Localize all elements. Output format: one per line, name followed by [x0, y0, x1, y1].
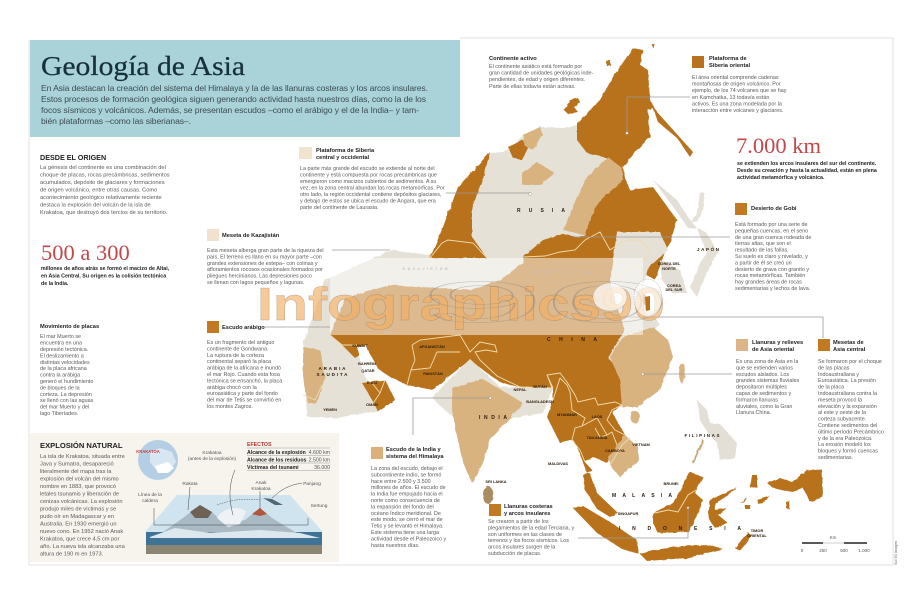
scale bar: Km: [830, 535, 837, 540]
country labels: [316, 208, 767, 538]
effects table: EFECTOS: [247, 442, 272, 448]
India surrounding beige: [432, 359, 553, 420]
east Siberia, Gobi, Central Asia and Southeast Asia brown plate: [330, 48, 693, 473]
legend: Plataforma de Siberia oriental: Siberia oriental: [709, 63, 751, 69]
country labels: BAHRÉIN: [358, 361, 376, 366]
Sri Lanka: [483, 486, 493, 504]
Continente activo text block: Continente activo: [489, 56, 537, 62]
Desde el origen text block: choque de placas, rocas precámbricas, sedimentos: [40, 172, 170, 178]
Taimyr brown patch: [508, 140, 528, 160]
effects table: 2.500 km: [309, 458, 330, 464]
legend: Desierto de Gobi: hay grandes áreas de rocas: [735, 280, 802, 286]
legend: Escudo arábigo: La ruptura de la corteza: [207, 353, 264, 359]
country labels: SAUDITA: [316, 372, 348, 377]
legend: Plataforma de Siberia oriental: en Kamchatka, 13 todavía están: [692, 95, 769, 101]
country labels: LAOS: [592, 414, 603, 419]
panel body text: Java y Sumatra, desapareció: [40, 462, 114, 468]
scale bar: 500: [840, 548, 848, 553]
legend: Escudo de la India y sistema del Himalaya: océano Índico meridional. De: [371, 510, 441, 517]
legend: Llanuras y relieves de Asia oriental: Es una zona de Asia en la: [736, 359, 798, 365]
scale bar: 0: [801, 548, 804, 553]
legend: Meseta de Kazajistán: [207, 229, 325, 286]
panel body text: nombre en 1883, que provocó: [40, 484, 116, 490]
Borneo: [653, 472, 703, 533]
legend: Plataforma de Siberia central y occidental: parte del continente de Laurasia.: [300, 205, 379, 211]
country labels: KUWAIT: [352, 343, 368, 348]
legend: Meseta de Kazajistán: pliegues hercinianos. Las depresiones poco: [207, 274, 312, 280]
legend: Llanuras y relieves de Asia oriental: grandes sistemas fluviales: [736, 378, 800, 384]
country labels: MALASIA: [612, 493, 672, 499]
legend: Escudo de la India y sistema del Himalaya: hace entre 2.500 y 3.500: [371, 479, 431, 485]
legend: Mesetas de Asia central: de las placas: [818, 365, 850, 371]
country labels: CHINA: [547, 337, 597, 343]
country labels: TAILANDIA: [587, 435, 608, 440]
legend: Desierto de Gobi: Su suelo es claro y nivelado, y: [735, 254, 808, 260]
legend: Llanuras costeras y arcos insulares: son uniformes en las clases de: [488, 532, 562, 538]
legend: Llanuras y relieves de Asia oriental: Llanuras y relieves: [752, 340, 803, 346]
Movimiento de placas text block: [40, 324, 99, 417]
legend: Plataforma de Siberia central y occidental: central y occidental: [316, 155, 370, 161]
legend: Desierto de Gobi: a partir de él se creó un: [735, 260, 792, 266]
legend: Mesetas de Asia central: al este y oeste de la: [818, 410, 866, 416]
watermark: [257, 258, 670, 335]
country labels: COREA: [667, 283, 681, 288]
Philippines: [697, 400, 737, 460]
legend: Mesetas de Asia central: [818, 339, 885, 461]
legend: Escudo de la India y sistema del Himalaya: Tetis y se levantó el Himalaya.: [371, 524, 444, 530]
Continente activo text block: pendientes, de edad y origen diferentes.: [489, 77, 585, 83]
legend: Escudo arábigo: los montes Zagros.: [207, 404, 253, 410]
Hainan: [630, 411, 640, 423]
legend: Llanuras y relieves de Asia oriental: capas de sedimentos y: [736, 391, 791, 397]
legend: Plataforma de Siberia central y occidental: vez, en la zona central abundan las rocas metamórficas. Por: [300, 186, 445, 192]
Desde el origen text block: DESDE EL ORIGEN: [40, 153, 106, 162]
legend: Escudo de la India y sistema del Himalaya: sistema del Himalaya: [386, 454, 444, 460]
Persian Gulf: [357, 345, 390, 377]
Movimiento de placas text block: contra la arábiga: [40, 373, 80, 379]
panel body text: cenizas volcánicas. La explosión: [40, 499, 123, 505]
effects table: [247, 442, 330, 471]
diagram labels: Sertung: [311, 503, 328, 509]
legend: Llanuras y relieves de Asia oriental: formaron llanuras: [736, 397, 778, 403]
legend: Plataforma de Siberia central y occidental: emergieron como macizos cubiertos de sedimentos. A su: [300, 179, 436, 185]
Desde el origen text block: de origen volcánico, entre otras causas. Como: [40, 188, 157, 194]
legend: Meseta de Kazajistán: Esta meseta alberga gran parte de la riqueza del: [207, 248, 324, 254]
legend: Mesetas de Asia central: Euroasiática. La presión: [818, 378, 876, 384]
legend: Mesetas de Asia central: Se formaron por el choque: [818, 359, 882, 365]
country labels: RUSIA: [517, 208, 565, 214]
tan band Siberia: [563, 157, 623, 235]
Continente activo text block: El continente asiático está formado por: [489, 64, 582, 70]
country labels: MONGOLIA: [535, 270, 591, 276]
diagram labels: caldera: [142, 498, 158, 504]
legend: Escudo arábigo: el mar Rojo. Cuando esta fosa: [207, 372, 280, 378]
legend: Plataforma de Siberia oriental: [692, 56, 788, 114]
leader lines: [265, 97, 823, 538]
watermark: 90: [420, 270, 670, 335]
legend: Plataforma de Siberia oriental: montañosas de origen volcánico. Por: [692, 82, 781, 88]
legend: Escudo arábigo: [207, 321, 284, 410]
legend: Escudo arábigo: Escudo arábigo: [222, 325, 265, 331]
legend: Desierto de Gobi: [735, 203, 813, 292]
east China plain tan: [610, 327, 673, 407]
legend: Escudo de la India y sistema del Himalaya: la expansión del fondo del: [371, 504, 434, 510]
Movimiento de placas text block: Movimiento de placas: [40, 324, 99, 330]
stat: 500 a 300: millones de años atrás se formó el macizo de Altai,: [41, 266, 170, 272]
Movimiento de placas text block: de bloques de la: [40, 385, 80, 391]
legend: Desierto de Gobi: rocas metamórficas. También: [735, 273, 805, 279]
effects table: Alcance de los residuos: [247, 458, 307, 464]
India shield tan: [452, 379, 523, 483]
leader dots: [489, 132, 689, 509]
legend: Mesetas de Asia central: meseta provocó la: [818, 397, 862, 403]
diagram labels: Panjang: [303, 481, 321, 487]
country labels: SRI LANKA: [485, 479, 507, 484]
legend: Desierto de Gobi: tierras altas, que son el: [735, 241, 791, 247]
panel body text: letales tsunamis y liberación de: [40, 492, 119, 498]
legend: Mesetas de Asia central: La erosión modeló los: [818, 442, 871, 448]
legend: Desierto de Gobi: desierto de grava con granito y: [735, 267, 809, 273]
legend: Plataforma de Siberia oriental: interacción entre volcanes y glaciares.: [692, 108, 783, 114]
Continente activo text block: Parte de ellas todavía están activas.: [489, 84, 576, 90]
country labels: ORIENTAL: [747, 533, 767, 538]
Movimiento de placas text block: El mar Muerto se: [40, 334, 81, 340]
country labels: VIETNAM: [632, 442, 650, 447]
legend: Llanuras y relieves de Asia oriental: escudos aislados. Los: [736, 372, 789, 378]
country labels: PAKISTÁN: [423, 371, 443, 376]
country labels: QATAR: [361, 368, 375, 373]
country labels: TIMOR: [751, 528, 763, 533]
legend: Escudo de la India y sistema del Himalaya: La zona del escudo, debajo el: [371, 466, 443, 472]
legend: Escudo de la India y sistema del Himalaya: actividad desde el Paleozoico y: [371, 536, 447, 542]
legend: Plataforma de Siberia central y occidental: La parte más grande del escudo se extiende al norte del: [300, 166, 435, 172]
legend: Meseta de Kazajistán: grandes extensiones de estepa– con colinas y: [207, 261, 318, 267]
stat: 500 a 300: en Asia Central. Su origen es la colisión tectónica: [41, 274, 166, 280]
intro text: focos sísmicos y volcánicos. Además, se presentan escudos –como el arábigo y el de la India– y tam-: [41, 105, 419, 115]
Desde el origen text block: [40, 153, 171, 216]
legend: Escudo arábigo: continental separó la placa: [207, 359, 271, 365]
legend: Llanuras y relieves de Asia oriental: aluviales, como la Gran: [736, 404, 792, 410]
legend: Escudo de la India y sistema del Himalaya: norte como consecuencia de: [371, 498, 440, 504]
stat: 7.000 km: 7.000 km: [736, 133, 822, 158]
Sulawesi: [708, 487, 737, 528]
legend: Meseta de Kazajistán: país. El terreno es llano en su mayor parte –con: [207, 254, 322, 260]
legend: Escudo de la India y sistema del Himalaya: subcontinente indio, se formó: [371, 472, 441, 478]
Taiwan: [679, 363, 685, 383]
legend: Escudo de la India y sistema del Himalaya: hasta nuestros días.: [371, 543, 420, 549]
Movimiento de placas text block: lago Tiberíades.: [40, 411, 78, 417]
legend: Mesetas de Asia central: y de la era Paleozoica.: [818, 436, 873, 442]
country labels: NEPAL: [514, 387, 527, 392]
country labels: IRÁN: [384, 330, 394, 335]
header panel: [30, 40, 460, 137]
Moluccas: [740, 475, 790, 509]
legend: Llanuras y relieves de Asia oriental: de Asia oriental: [752, 347, 795, 353]
intro text: Estos procesos de formación geológica siguen generando actividad hasta nuestros días, como la de los: [41, 94, 426, 104]
country labels: CAMBOYA: [605, 448, 625, 453]
panel body text: Australia. En 1930 emergió un: [40, 522, 117, 528]
land base: Russia and Central Asia: [303, 125, 660, 388]
legend: Escudo de la India y sistema del Himalaya: millones de años. El escudo de: [371, 485, 446, 491]
legend: Escudo de la India y sistema del Himalaya: la India fue empujado hacia el: [371, 492, 443, 498]
country labels: COREA DEL: [658, 261, 681, 266]
country labels: INDIA: [479, 415, 507, 421]
legend: Escudo de la India y sistema del Himalaya: Este sistema tiene una larga: [371, 530, 439, 536]
legend: Mesetas de Asia central: elevación y la expansión: [818, 404, 877, 410]
effects table: Alcance de la explosión: [247, 450, 306, 456]
Movimiento de placas text block: de la placa africana: [40, 366, 87, 372]
Arabian peninsula: [303, 335, 395, 418]
scale bar: 1.000: [858, 548, 870, 553]
legend: Llanuras costeras y arcos insulares: [488, 504, 576, 557]
icon: globe locator: [136, 440, 178, 480]
legend: Desierto de Gobi: de una gran cuenca rodeada de: [735, 235, 811, 241]
Krakatoa label: (antes de la explosión): [188, 456, 237, 462]
stat: 7.000 km: [736, 133, 878, 181]
Java and lesser Sunda: [640, 545, 723, 561]
panel body text: año. La nueva isla alcanzaba una: [40, 544, 126, 550]
UAE and Oman: [362, 380, 395, 412]
scale bar: 250: [819, 548, 827, 553]
Movimiento de placas text block: se llenó con las aguas: [40, 398, 94, 404]
legend: Llanuras costeras y arcos insulares: subducción de placas.: [488, 551, 541, 557]
panel body text: produjo miles de víctimas y se: [40, 506, 116, 512]
legend: Desierto de Gobi: Desierto de Gobi: [751, 206, 797, 212]
legend: Meseta de Kazajistán: se llenan con lagos pequeños y lagunas.: [207, 280, 304, 286]
stat: 7.000 km: se extienden los arcos insulares del sur del continente.: [737, 161, 877, 167]
intro text: En Asia destacan la creación del sistema del Himalaya y la de las llanuras costeras y los arcos insulares.: [41, 83, 428, 93]
legend: Desierto de Gobi: sedimentarias y lechos de lava.: [735, 286, 810, 292]
Desde el origen text block: acontecimiento geológico relativamente reciente: [40, 195, 162, 201]
panel body text: La isla de Krakatoa, situada entre: [40, 454, 125, 460]
legend: Escudo arábigo: del mar de Tetis se convirtió en: [207, 398, 281, 404]
legend: Plataforma de Siberia oriental: El área oriental comprende cadenas: [692, 75, 779, 81]
Movimiento de placas text block: depresión tectónica.: [40, 347, 88, 353]
Sumatra: [573, 506, 639, 554]
Indochina tan: [608, 435, 639, 477]
legend: Escudo arábigo: tectónica se ensanchó, la placa: [207, 378, 282, 384]
legend: Plataforma de Siberia central y occidental: otro lado, la región occidental contiene depósitos glaciares,: [300, 192, 442, 198]
legend: Escudo de la India y sistema del Himalaya: Escudo de la India y: [386, 447, 442, 453]
legend: Llanuras costeras y arcos insulares: y arcos insulares: [504, 511, 550, 517]
legend: Plataforma de Siberia central y occidental: continente y está compuesta por rocas precámbricas que: [300, 172, 437, 178]
Krakatoa label: Krakatoa: [202, 450, 222, 456]
panel body text: explosión del volcán del mismo: [40, 476, 119, 482]
legend: Plataforma de Siberia central y occidental: y debajo de estos se ubica el escudo de Angara, que era: [300, 198, 436, 204]
legend: Mesetas de Asia central: último período Precámbrico: [818, 429, 884, 435]
country labels: KAZAJISTÁN: [402, 266, 448, 271]
diagram: Krakatoa caldera block: [138, 470, 328, 554]
platform: west Ural brown band: [430, 152, 490, 258]
Manchurian plain beige: [608, 232, 668, 365]
legend: Plataforma de Siberia oriental: activos. Es una zona modelada por la: [692, 101, 782, 107]
legend: Mesetas de Asia central: corteza subyacente.: [818, 417, 866, 423]
country labels: INDONESIA: [619, 526, 741, 532]
legend: Llanuras costeras y arcos insulares: arcos insulares surgen de la: [488, 545, 555, 551]
legend: Plataforma de Siberia oriental: Plataforma de: [709, 56, 747, 62]
watermark: Infographics90: [257, 278, 665, 330]
legend: Mesetas de Asia central: Asia central: [833, 347, 866, 353]
Taimyr tan patch: [523, 127, 543, 150]
diagram labels: Anak: [256, 480, 267, 486]
legend: Llanuras y relieves de Asia oriental: que se extienden varios: [736, 365, 793, 371]
country labels: E A U: [367, 380, 377, 385]
legend: Mesetas de Asia central: sedimentarias.: [818, 455, 853, 461]
legend: Mesetas de Asia central: Indoaustraliana y: [818, 372, 859, 378]
legend: Llanuras costeras y arcos insulares: Se crearon a partir de los: [488, 519, 549, 525]
diagram labels: Rakata: [182, 481, 198, 487]
country labels: NORTE: [662, 266, 676, 271]
Movimiento de placas text block: encuentra en una: [40, 340, 82, 346]
country labels: BUTÁN: [533, 384, 547, 389]
legend: Mesetas de Asia central: bloques y formó cuencas: [818, 449, 878, 455]
effects table: 4.600 km: [309, 450, 330, 456]
scale bar: [801, 535, 870, 553]
Movimiento de placas text block: El deslizamiento a: [40, 353, 84, 359]
Desde el origen text block: La génesis del continente es una combinación del: [40, 165, 166, 171]
country labels: MALDIVAS: [548, 461, 568, 466]
title: Geología de Asia: [41, 51, 245, 81]
Movimiento de placas text block: del mar Muerto y del: [40, 405, 89, 411]
Korea: [660, 260, 687, 293]
stat: 500 a 300: [41, 240, 171, 287]
legend: Escudo arábigo: arábiga de la africana e inundó: [207, 366, 281, 372]
legend: Llanuras costeras y arcos insulares: terrenos y los focos sísmicos. Los: [488, 538, 569, 544]
legend: Escudo arábigo: continente de Gondwana.: [207, 346, 268, 352]
country labels: OMÁN: [366, 402, 378, 407]
legend: Meseta de Kazajistán: Meseta de Kazajistán: [222, 233, 280, 239]
country labels: YEMEN: [323, 407, 337, 412]
legend: Mesetas de Asia central: Indoaustraliana contra la: [818, 391, 877, 397]
effects table: 36.000: [314, 465, 330, 471]
country labels: DEL SUR: [665, 287, 683, 292]
legend: Escudo de la India y sistema del Himalaya: este modo, se cerró el mar de: [371, 517, 443, 523]
country labels: MYANMAR: [557, 412, 577, 417]
Japan: [690, 192, 718, 297]
legend: Plataforma de Siberia central y occidental: [299, 147, 446, 211]
Continente activo text block: gran cantidad de unidades geológicas inde-: [489, 71, 594, 77]
Arabian tan patch: [303, 347, 325, 403]
legend: Llanuras costeras y arcos insulares: plegamientos de la edad Terciaria, y: [488, 525, 575, 531]
panel body text: Krakatoa, que crece 4,5 cm por: [40, 536, 119, 542]
panel: Explosión natural: [30, 433, 339, 562]
Continente activo text block: [489, 56, 595, 90]
stat: 7.000 km: Desde su creación y hasta la actualidad, están en plena: [737, 168, 877, 174]
Sakhalin: [653, 180, 697, 228]
country labels: JAPÓN: [697, 245, 719, 252]
legend: Llanuras y relieves de Asia oriental: [736, 339, 803, 416]
land shapes: [303, 44, 823, 561]
stat: 500 a 300: de la India.: [41, 281, 69, 287]
Papua: [767, 469, 823, 502]
intro text: bién plataformas –como las siberianas–.: [41, 116, 191, 126]
legend: Escudo arábigo: Es un fragmento del antiguo: [207, 340, 274, 346]
panel body text: literalmente del mapa tras la: [40, 469, 112, 475]
Movimiento de placas text block: corteza. La depresión: [40, 392, 92, 398]
panel body text: pudo oír en Madagascar y en: [40, 514, 114, 520]
Movimiento de placas text block: generó el hundimiento: [40, 379, 93, 385]
Timor: [735, 532, 751, 551]
image credit: Sol 90 Images: [894, 541, 898, 565]
stat: 500 a 300: 500 a 300: [41, 240, 130, 265]
legend: Mesetas de Asia central: Mesetas de: [833, 340, 864, 346]
Desde el origen text block: destaca la explosión del volcán de la isla de: [40, 202, 151, 208]
country labels: BRUNEI: [664, 481, 678, 486]
Movimiento de placas text block: distintas velocidades: [40, 360, 90, 366]
stat: 7.000 km: actividad metamórfica y volcánica.: [737, 175, 825, 181]
diagram labels: Línea de la: [138, 492, 162, 498]
Desde el origen text block: acumulados, depósito de glaciares y formaciones: [40, 180, 165, 186]
legend: Desierto de Gobi: pequeñas cuencas, en el seno: [735, 228, 808, 234]
diagram labels: Krakatoa: [251, 486, 271, 492]
legend: Desierto de Gobi: Está formado por una serie de: [735, 222, 808, 228]
legend: Llanuras y relieves de Asia oriental: Llanura China.: [736, 410, 771, 416]
effects table: Víctimas del tsunami: [247, 465, 299, 471]
Palawan: [693, 440, 703, 463]
legend: Desierto de Gobi: resultado de las fallas.: [735, 248, 789, 254]
panel body text: nuevo cono. En 1952 nació Anak: [40, 529, 123, 535]
country labels: AFGANISTÁN: [419, 344, 445, 349]
legend: Escudo de la India y sistema del Himalaya: [371, 447, 448, 549]
legend: Mesetas de Asia central: de la placa: [818, 385, 844, 391]
Malay peninsula: [583, 473, 618, 517]
Desde el origen text block: Krakatoa, que destruyó dos tercios de su territorio.: [40, 210, 168, 216]
country labels: ARABIA: [318, 366, 346, 371]
legend: Mesetas de Asia central: Contiene sedimentos del: [818, 423, 877, 429]
country labels: FILIPINAS: [684, 433, 720, 438]
Arctic islands: [564, 44, 655, 114]
legend: Escudo arábigo: euroasiática y parte del fondo: [207, 391, 278, 397]
panel heading: EXPLOSIÓN NATURAL: [40, 441, 123, 450]
legend: Plataforma de Siberia central y occidental: Plataforma de Siberia: [316, 148, 375, 154]
legend: Meseta de Kazajistán: afloramientos rocosos ocasionales formados por: [207, 267, 323, 273]
panel body text: altura de 190 m en 1973.: [40, 552, 104, 558]
country labels: BANGLADESH: [526, 399, 554, 404]
icon: globe locator: KRAKATOA: [136, 449, 160, 454]
legend: Llanuras costeras y arcos insulares: Llanuras costeras: [504, 504, 553, 510]
central Siberia tan patch: [522, 162, 555, 185]
legend: Escudo arábigo: arábiga chocó con la: [207, 385, 257, 391]
legend: Llanuras y relieves de Asia oriental: depositaron múltiples: [736, 385, 787, 391]
borders: [303, 232, 696, 513]
country labels: SINGAPUR: [618, 511, 638, 516]
map of Asia: [265, 44, 823, 561]
legend: Plataforma de Siberia oriental: ejemplo, de los 74 volcanes que se hay: [692, 88, 787, 94]
